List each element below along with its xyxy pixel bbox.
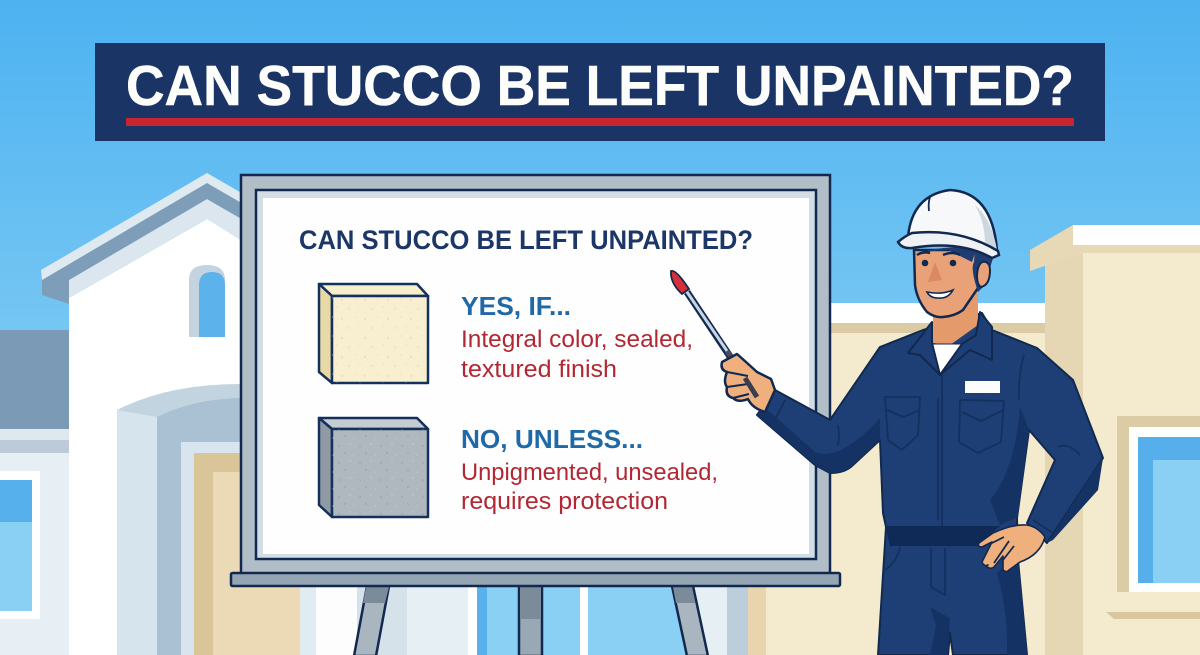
collar bbox=[908, 312, 992, 375]
board heading: CAN STUCCO BE LEFT UNPAINTED? bbox=[299, 225, 753, 255]
board tray bbox=[231, 573, 840, 586]
text: yes conditions: Integral color, sealed, bbox=[461, 326, 693, 353]
hand on hip bbox=[978, 525, 1045, 572]
title banner bbox=[95, 43, 1105, 141]
text: yes heading: YES, IF... bbox=[461, 291, 571, 321]
icon: painted stucco block bbox=[319, 284, 428, 383]
t-shirt and neck bbox=[932, 290, 978, 374]
face features bbox=[917, 252, 960, 298]
text: no conditions bbox=[461, 459, 718, 515]
belt bbox=[885, 526, 1000, 546]
text: no conditions: requires protection bbox=[461, 488, 668, 515]
icon: unpainted stucco block bbox=[319, 418, 428, 517]
building: entry and window beneath the board bbox=[240, 586, 766, 655]
uniform seams and pockets bbox=[775, 355, 1080, 595]
pointing hand bbox=[722, 354, 775, 412]
text: no conditions: Unpigmented, unsealed, bbox=[461, 459, 718, 486]
building: central white house with gable bbox=[41, 173, 258, 655]
building: right cream house and tower bbox=[766, 225, 1200, 655]
title red underline bbox=[126, 118, 1074, 126]
worker figure bbox=[671, 190, 1103, 655]
easel legs bbox=[354, 586, 708, 655]
text: yes conditions bbox=[461, 326, 693, 383]
head bbox=[914, 247, 996, 317]
text: yes conditions: textured finish bbox=[461, 356, 617, 383]
uniform body bbox=[757, 313, 1103, 655]
hard hat bbox=[898, 190, 999, 258]
text: no heading: NO, UNLESS... bbox=[461, 424, 643, 454]
title text: CAN STUCCO BE LEFT UNPAINTED? bbox=[126, 54, 1074, 118]
pointer stick bbox=[671, 271, 757, 397]
name badge bbox=[965, 381, 1000, 393]
uniform shading bbox=[757, 405, 1103, 655]
building: left low house bbox=[0, 330, 70, 655]
presentation board bbox=[231, 175, 840, 586]
